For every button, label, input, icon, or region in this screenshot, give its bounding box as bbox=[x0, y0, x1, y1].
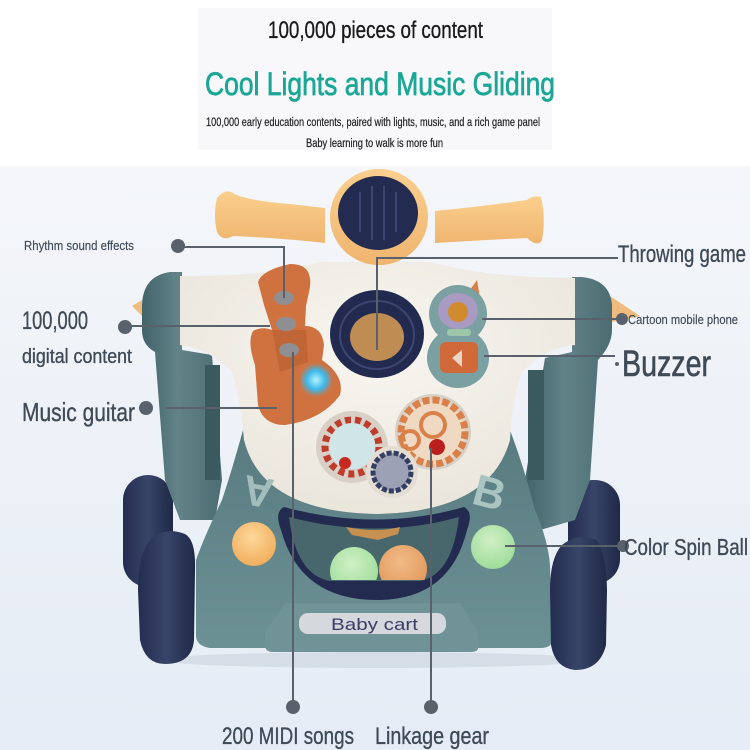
horn button bbox=[338, 176, 418, 250]
handlebar bbox=[215, 169, 544, 265]
subtitle line 2: Baby learning to walk is more fun bbox=[306, 138, 443, 150]
baby cart badge: Baby cart bbox=[331, 615, 418, 634]
callout: digital content bbox=[118, 320, 270, 334]
ground shadow bbox=[160, 652, 590, 668]
walker teal body bbox=[196, 430, 552, 648]
ball tray bbox=[278, 507, 470, 600]
letters A and B: A bbox=[239, 466, 277, 518]
side frame posts bbox=[132, 272, 640, 530]
green spin ball bbox=[471, 525, 515, 569]
green ball bbox=[330, 547, 378, 580]
orange ball bbox=[379, 545, 427, 580]
callout: cartoon mobile phone bbox=[482, 313, 628, 325]
guitar light bbox=[299, 363, 333, 397]
toy phone bbox=[427, 280, 489, 388]
front wheels bbox=[138, 531, 607, 670]
label: 100,000 digital content: 100,000 bbox=[22, 307, 88, 335]
label: 100,000 digital content bbox=[22, 307, 132, 368]
callout: 200 midi songs bbox=[286, 352, 300, 714]
throwing ring bbox=[330, 290, 424, 378]
callout lines and dots bbox=[118, 239, 629, 714]
rear wheels bbox=[123, 475, 620, 587]
baby walker illustration bbox=[123, 169, 640, 670]
product photo background bbox=[0, 166, 750, 750]
guitar toy bbox=[250, 264, 341, 425]
label: rhythm sound effects: Rhythm sound effects bbox=[24, 238, 134, 253]
subtitle line 1: 100,000 early education contents, paired with lights, music, and a rich game panel bbox=[206, 117, 540, 129]
label: buzzer: Buzzer bbox=[622, 343, 711, 384]
callout: rhythm sound effects bbox=[171, 239, 284, 298]
letters A and B: B bbox=[468, 465, 511, 521]
heading: pieces of content: 100,000 pieces of content bbox=[268, 17, 483, 44]
baby cart badge bbox=[265, 603, 478, 652]
title: Cool Lights and Music Gliding bbox=[205, 66, 555, 102]
callout: throwing game bbox=[377, 258, 618, 350]
letters A and B bbox=[239, 465, 511, 521]
callout: linkage gear bbox=[424, 448, 438, 714]
cream control panel bbox=[180, 262, 575, 514]
callout: color spin ball bbox=[505, 540, 629, 552]
yellow spin ball bbox=[232, 522, 276, 566]
callout: buzzer bbox=[484, 356, 619, 366]
header panel bbox=[198, 8, 555, 150]
label: linkage gear: Linkage gear bbox=[375, 723, 489, 750]
label: 100,000 digital content: digital content bbox=[22, 346, 132, 368]
callout: music guitar bbox=[139, 401, 277, 415]
label: 200 midi songs: 200 MIDI songs bbox=[222, 723, 354, 750]
label: music guitar: Music guitar bbox=[22, 397, 135, 427]
linkage gears bbox=[316, 394, 471, 498]
